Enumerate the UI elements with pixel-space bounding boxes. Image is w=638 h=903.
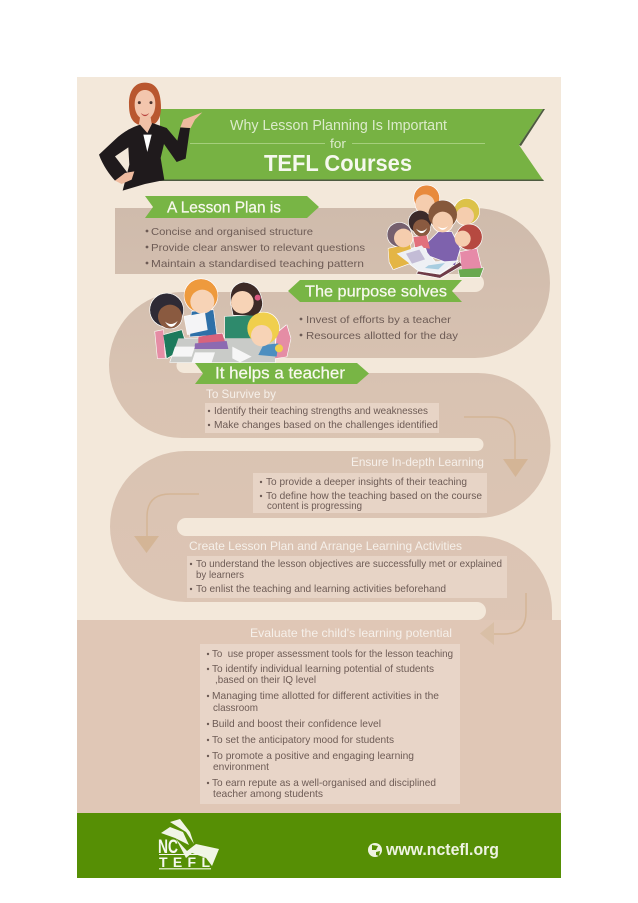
icon: globe xyxy=(368,843,382,857)
panel: evaluate learning potential: teacher among students xyxy=(213,788,323,800)
ribbon: The purpose solves xyxy=(288,280,462,302)
list: lesson plan bullets: Provide clear answer to relevant questions xyxy=(151,242,365,254)
panel: evaluate learning potential: ,based on their IQ level xyxy=(215,674,316,686)
panel: evaluate learning potential: To earn repute as a well-organised and disciplined xyxy=(212,777,436,789)
page background panel xyxy=(77,77,561,878)
panel: to survive by xyxy=(205,403,439,433)
illustration: children studying at a table xyxy=(150,279,291,362)
panel: evaluate learning potential: environment xyxy=(213,761,269,773)
panel: evaluate learning potential: classroom xyxy=(213,702,258,714)
panel: create lesson plan: To understand the lesson objectives are successfully met or explained xyxy=(196,558,502,570)
illustration: teacher reading with children xyxy=(387,185,483,278)
title main: TEFL Courses: TEFL Courses xyxy=(264,150,412,176)
panel: evaluate learning potential: To set the anticipatory mood for students xyxy=(212,734,394,746)
logo: NC TEFL: TEFL xyxy=(159,854,210,870)
logo: NC TEFL xyxy=(158,819,219,870)
panel: create lesson plan: by learners xyxy=(196,569,244,581)
list: purpose bullets: Invest of efforts by a teacher xyxy=(306,314,452,326)
list: lesson plan bullets: Concise and organised structure xyxy=(151,226,313,238)
ribbon label: The purpose solves xyxy=(305,284,447,300)
panel: in-depth learning xyxy=(253,473,487,513)
arrow: down to lesson plan activities xyxy=(134,494,199,553)
arrow: down to in-depth learning xyxy=(464,417,528,477)
panel: evaluate learning potential: To use proper assessment tools for the lesson teaching xyxy=(212,648,453,660)
heading: Evaluate the child's learning potential: Evaluate the child's learning potential xyxy=(250,626,452,640)
list: lesson plan bullets xyxy=(146,226,365,270)
panel: evaluate learning potential: To promote a positive and engaging learning xyxy=(212,750,414,762)
winding path band xyxy=(109,208,552,620)
title word: for: for xyxy=(330,136,347,151)
panel: in-depth learning: content is progressing xyxy=(267,500,362,512)
panel: to survive by: Make changes based on the challenges identified xyxy=(214,419,438,431)
panel: evaluate learning potential: Build and boost their confidence level xyxy=(212,718,381,730)
panel: in-depth learning: To provide a deeper insights of their teaching xyxy=(266,476,467,488)
footer band xyxy=(77,813,561,878)
panel: in-depth learning: To define how the teaching based on the course xyxy=(266,490,482,502)
panel: evaluate learning potential: To identify individual learning potential of students xyxy=(212,663,434,675)
ribbon: It helps a teacher xyxy=(195,363,369,384)
ribbon label: It helps a teacher xyxy=(215,364,345,382)
list: purpose bullets xyxy=(300,314,459,342)
bottom section block xyxy=(77,620,561,813)
website address: www.nctefl.org xyxy=(385,841,499,859)
ribbon label: A Lesson Plan is xyxy=(167,200,281,216)
panel: create lesson plan: To enlist the teaching and learning activities beforehand xyxy=(196,583,446,595)
list: lesson plan bullets: Maintain a standardised teaching pattern xyxy=(151,258,364,270)
title ribbon xyxy=(160,109,545,181)
heading: To Survive by: To Survive by xyxy=(206,387,276,401)
arrow: left to evaluation xyxy=(480,593,526,645)
panel: evaluate learning potential xyxy=(200,644,460,804)
ribbon: A Lesson Plan is xyxy=(145,196,319,218)
panel: evaluate learning potential: Managing time allotted for different activities in the xyxy=(212,690,439,702)
heading: Ensure In-depth Learning: Ensure In-depth Learning xyxy=(351,455,484,469)
title line one: Why Lesson Planning Is Important xyxy=(230,118,447,134)
illustration: teacher pointing xyxy=(99,83,202,191)
list: purpose bullets: Resources allotted for the day xyxy=(306,330,459,342)
panel: create lesson plan xyxy=(187,556,507,598)
panel: to survive by: Identify their teaching strengths and weaknesses xyxy=(214,405,428,417)
logo: NC TEFL: NC xyxy=(158,837,178,858)
heading: Create Lesson Plan and Arrange Learning Activities: Create Lesson Plan and Arrange Learning Activities xyxy=(189,539,462,553)
